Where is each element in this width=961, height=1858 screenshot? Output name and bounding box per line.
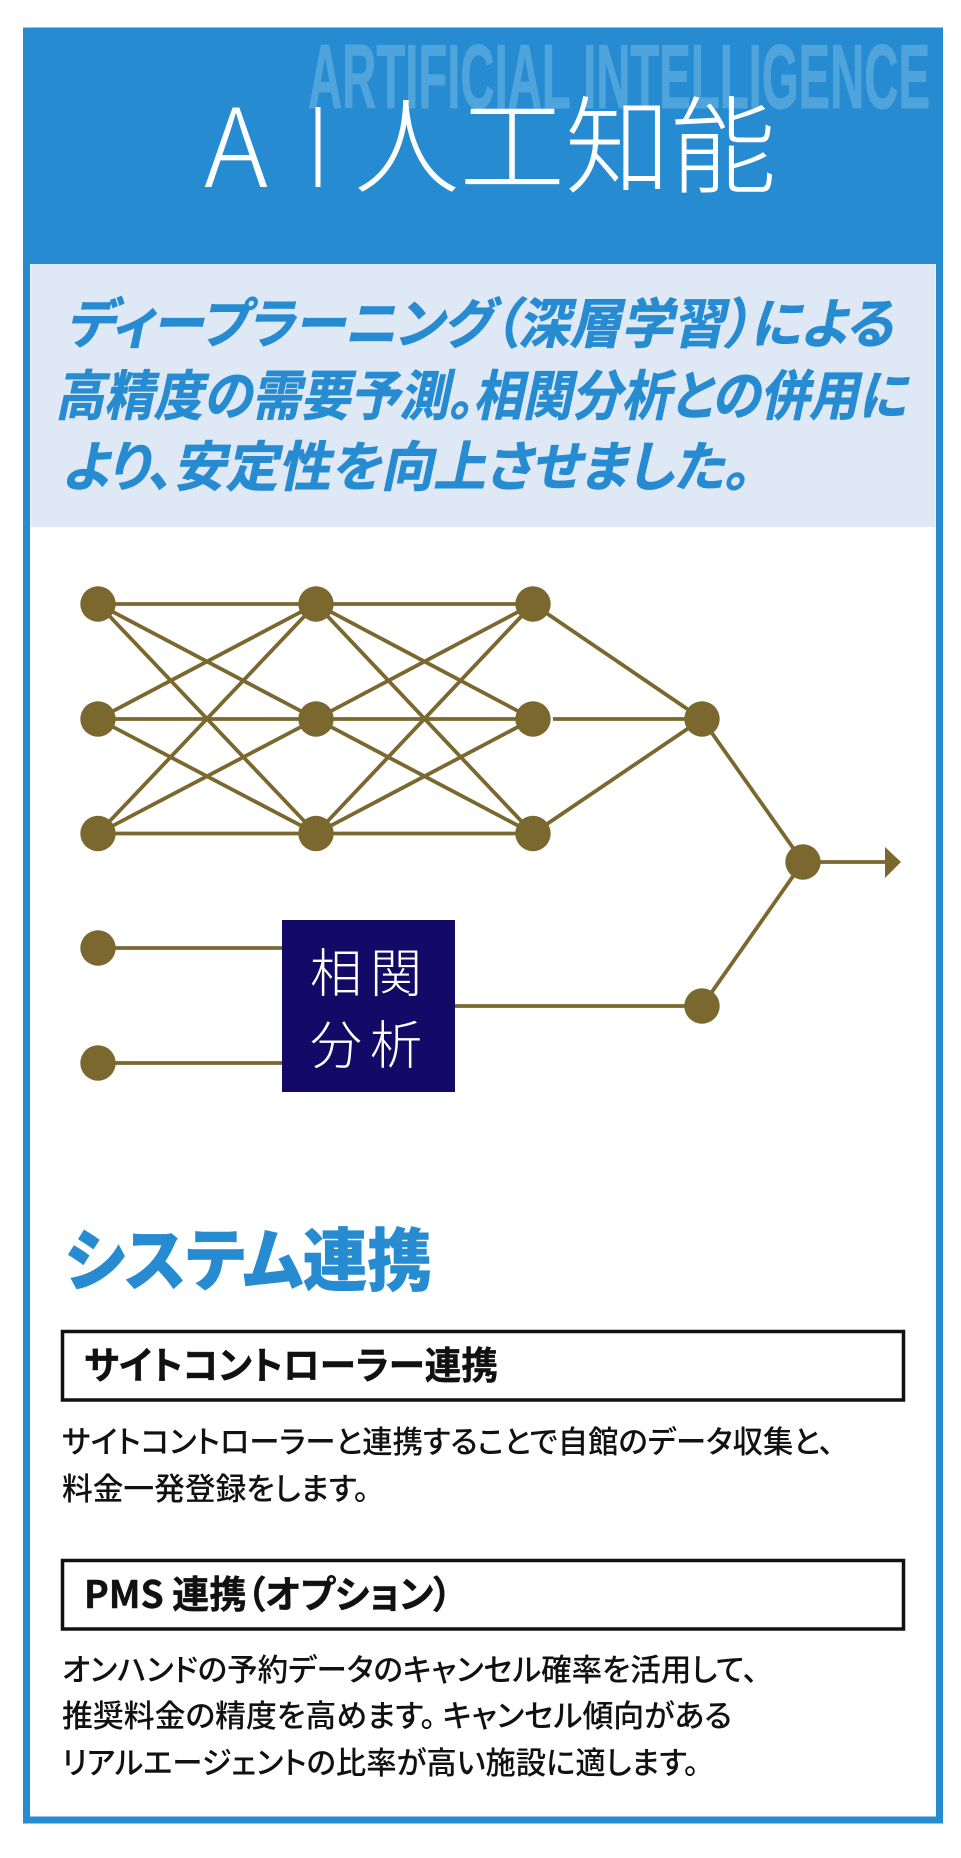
subheading text: PMS 連携（オプション） [84, 1564, 452, 1619]
chart: neural network diagram [80, 586, 901, 1092]
box label line 2: 分析 [310, 1004, 422, 1079]
panel: lead statement [30, 264, 936, 527]
subheading box [62, 1332, 904, 1400]
title: A [204, 62, 268, 219]
panel: header band [23, 27, 943, 264]
arrow head [885, 847, 901, 878]
description: 料金一発登録をします。 [62, 1464, 369, 1509]
description: リアルエージェントの比率が高い施設に適します。 [62, 1738, 699, 1783]
description: 推奨料金の精度を高めます。 キャンセル傾向がある [62, 1691, 732, 1736]
panel: site controller [62, 1332, 904, 1509]
panel: PMS integration [62, 1560, 904, 1783]
network connection lines [98, 604, 886, 1063]
subheading text: サイトコントローラー連携 [84, 1335, 498, 1390]
network nodes [80, 586, 821, 1081]
heading: system integration: システム連携 [65, 1206, 432, 1305]
lead text line 3: より、安定性を向上させました。 [59, 424, 763, 502]
subheading box [62, 1560, 904, 1629]
description: オンハンドの予約データのキャンセル確率を活用して、 [62, 1645, 758, 1690]
title: 人工知能 [354, 62, 776, 216]
box label line 1: 相関 [310, 932, 422, 1007]
lead text line 1: ディープラーニング（深層学習）による [63, 281, 906, 359]
box: correlation analysis [282, 920, 455, 1092]
description: サイトコントローラーと連携することで自館のデータ収集と、 [62, 1417, 834, 1462]
description [62, 1645, 758, 1783]
description [62, 1417, 834, 1509]
